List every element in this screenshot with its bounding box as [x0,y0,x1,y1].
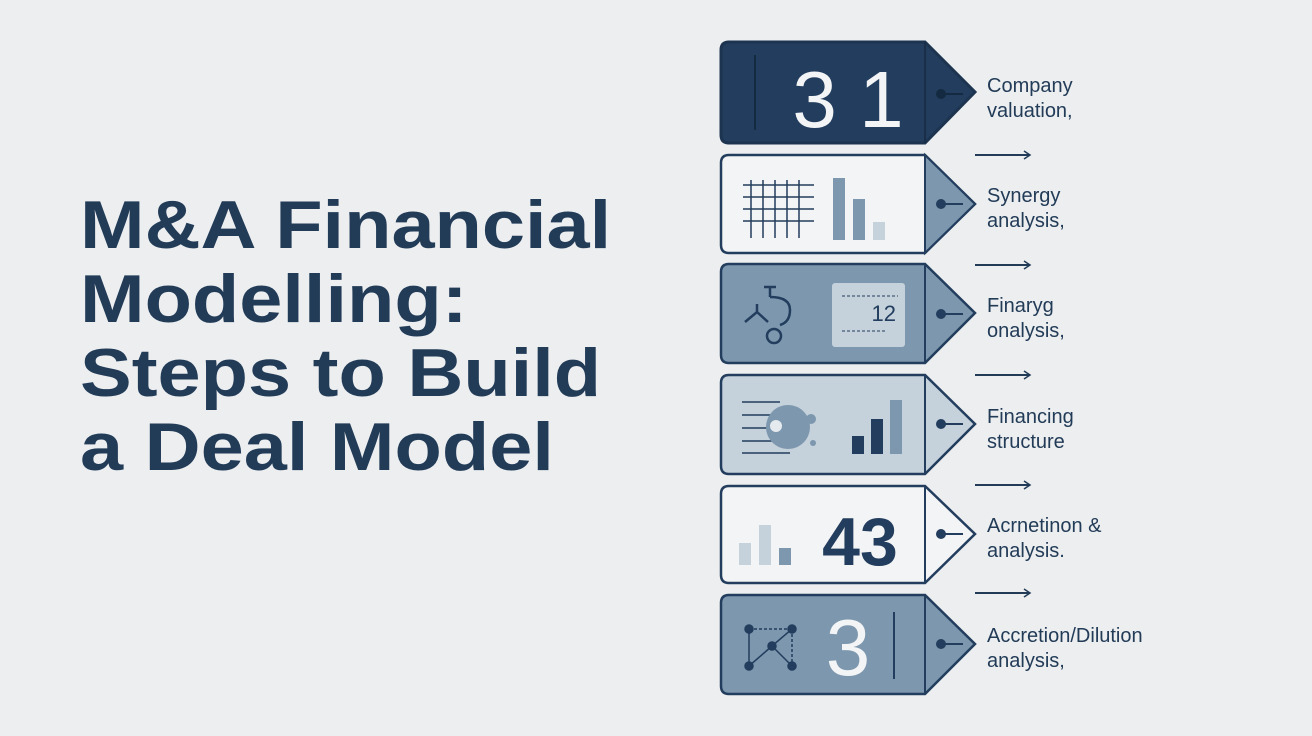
tag 4: financing structure: Financing [987,406,1074,428]
tag 1: company valuation [721,42,1073,144]
tag 5: accretion analysis: analysis. [987,540,1065,562]
tag 6: accretion/dilution analysis: analysis, [987,650,1065,672]
tag 4: financing structure [721,375,1074,474]
tag 5: accretion analysis [721,486,1102,583]
arrow 2 [975,261,1030,269]
title [80,187,611,485]
title: a Deal Model [80,409,554,485]
arrow 5 [975,589,1030,597]
arrow 3 [975,371,1030,379]
tag 5: accretion analysis: Acrnetinon & [987,515,1102,537]
arrow 1 [975,151,1030,159]
tag 2: synergy analysis: Synergy [987,185,1060,207]
tag 6: accretion/dilution analysis [721,595,1143,694]
tag 2: synergy analysis: analysis, [987,210,1065,232]
title: M&A Financial [80,187,611,263]
title: Modelling: [80,261,468,337]
tag 1: company valuation: 3 1 [792,55,904,144]
tag 1: company valuation: Company [987,75,1073,97]
tag 6: accretion/dilution analysis: 3 [826,603,870,692]
tag 1: company valuation: valuation, [987,100,1073,122]
tag 5: accretion analysis: 43 [822,504,898,580]
tag 3: financing analysis: Finaryg [987,295,1054,317]
tag 3: financing analysis: onalysis, [987,320,1065,342]
tag 4: financing structure: structure [987,431,1065,453]
tag 6: accretion/dilution analysis: Accretion/Dilution [987,625,1143,647]
tag 2: synergy analysis [721,155,1065,253]
tag 3: financing analysis [721,264,1065,363]
arrow 4 [975,481,1030,489]
tag 3: financing analysis: 12 [872,301,896,326]
title: Steps to Build [80,335,601,411]
